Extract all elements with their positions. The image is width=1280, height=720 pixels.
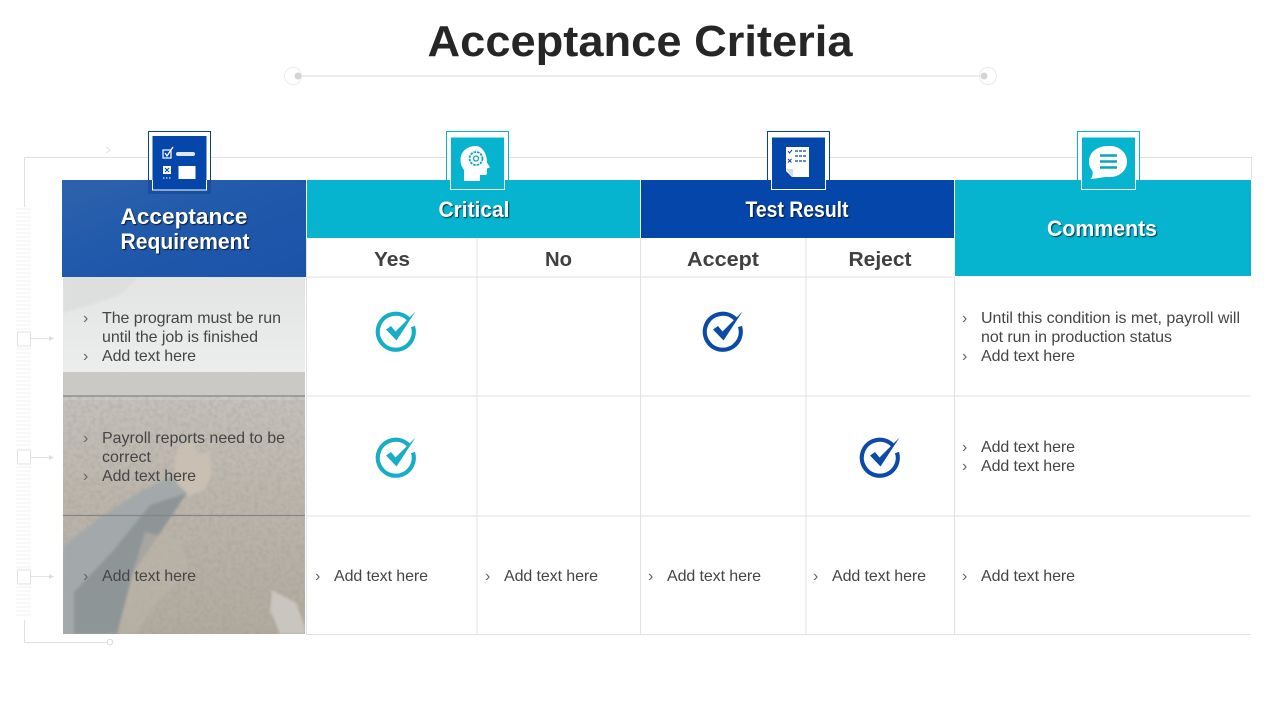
check mark: row 1 yes — [378, 312, 416, 350]
row 3: requirement text: Add text here — [102, 568, 196, 585]
title divider — [284, 68, 996, 84]
row 1: requirement text: The program must be run — [102, 310, 281, 327]
header: test result: Test Result — [746, 197, 849, 222]
row 3: requirement text: › — [83, 568, 88, 585]
sub-header labels — [374, 249, 912, 271]
row 1: requirement text: until the job is finished — [102, 329, 258, 346]
row 2: requirement text — [83, 430, 285, 485]
icon: acceptance checklist — [148, 132, 211, 194]
row 2: comments text: › — [962, 458, 967, 475]
row 1: requirement text: › — [83, 348, 88, 365]
sub-header labels: Yes — [374, 249, 410, 271]
header: acceptance requirement: Acceptance — [120, 204, 248, 229]
icon: test result document — [768, 132, 830, 190]
header: comments — [955, 180, 1251, 276]
row 1: comments text — [962, 310, 1240, 365]
photo panel: thumbs-up background — [63, 277, 305, 634]
check mark: row 1 accept — [705, 312, 742, 350]
check mark: row 2 reject — [862, 438, 900, 476]
row 2: comments text: Add text here — [981, 458, 1075, 475]
header: critical — [307, 180, 640, 238]
row 3: cell texts: › — [485, 568, 490, 585]
header: acceptance requirement: Requirement — [120, 229, 250, 254]
row 1: comments text: Until this condition is met, payroll will — [981, 310, 1240, 327]
row 2: requirement text: correct — [102, 449, 152, 466]
decorative frame and row markers — [16, 147, 1252, 645]
table grid lines — [63, 238, 1251, 634]
icon: speech bubble — [1078, 132, 1140, 190]
row 3: cell texts — [315, 568, 1075, 585]
row 1: comments text: not run in production status — [981, 329, 1172, 346]
sub-header labels: Accept — [687, 249, 759, 271]
row 1: comments text: Add text here — [981, 348, 1075, 365]
row 2: requirement text: Payroll reports need to be — [102, 430, 285, 447]
row 1: requirement text — [83, 310, 281, 365]
header: critical: Critical — [438, 197, 510, 222]
row 3: cell texts: Add text here — [334, 568, 428, 585]
row 1: comments text: › — [962, 348, 967, 365]
header: test result — [641, 180, 954, 238]
row 3: cell texts: › — [315, 568, 320, 585]
row 1: requirement text: Add text here — [102, 348, 196, 365]
header: acceptance requirement — [62, 180, 306, 277]
row 3: cell texts: Add text here — [981, 568, 1075, 585]
row 2: requirement text: Add text here — [102, 468, 196, 485]
check mark: row 2 yes — [378, 438, 416, 476]
row 2: requirement text: › — [83, 468, 88, 485]
row 3: cell texts: Add text here — [832, 568, 926, 585]
title: Acceptance Criteria — [428, 17, 853, 66]
row 1: comments text: › — [962, 310, 967, 327]
header: comments: Comments — [1047, 216, 1157, 241]
icon: head with gear — [446, 132, 508, 190]
sub-header labels: Reject — [848, 249, 912, 271]
row 1: requirement text: › — [83, 310, 88, 327]
row 3: cell texts: › — [813, 568, 818, 585]
row 2: requirement text: › — [83, 430, 88, 447]
row 3: cell texts: › — [962, 568, 967, 585]
row 3: cell texts: Add text here — [504, 568, 598, 585]
sub-header labels: No — [545, 249, 572, 271]
row 2: comments text — [962, 439, 1075, 475]
row 3: cell texts: › — [648, 568, 653, 585]
row 2: comments text: Add text here — [981, 439, 1075, 456]
row 3: cell texts: Add text here — [667, 568, 761, 585]
row 2: comments text: › — [962, 439, 967, 456]
